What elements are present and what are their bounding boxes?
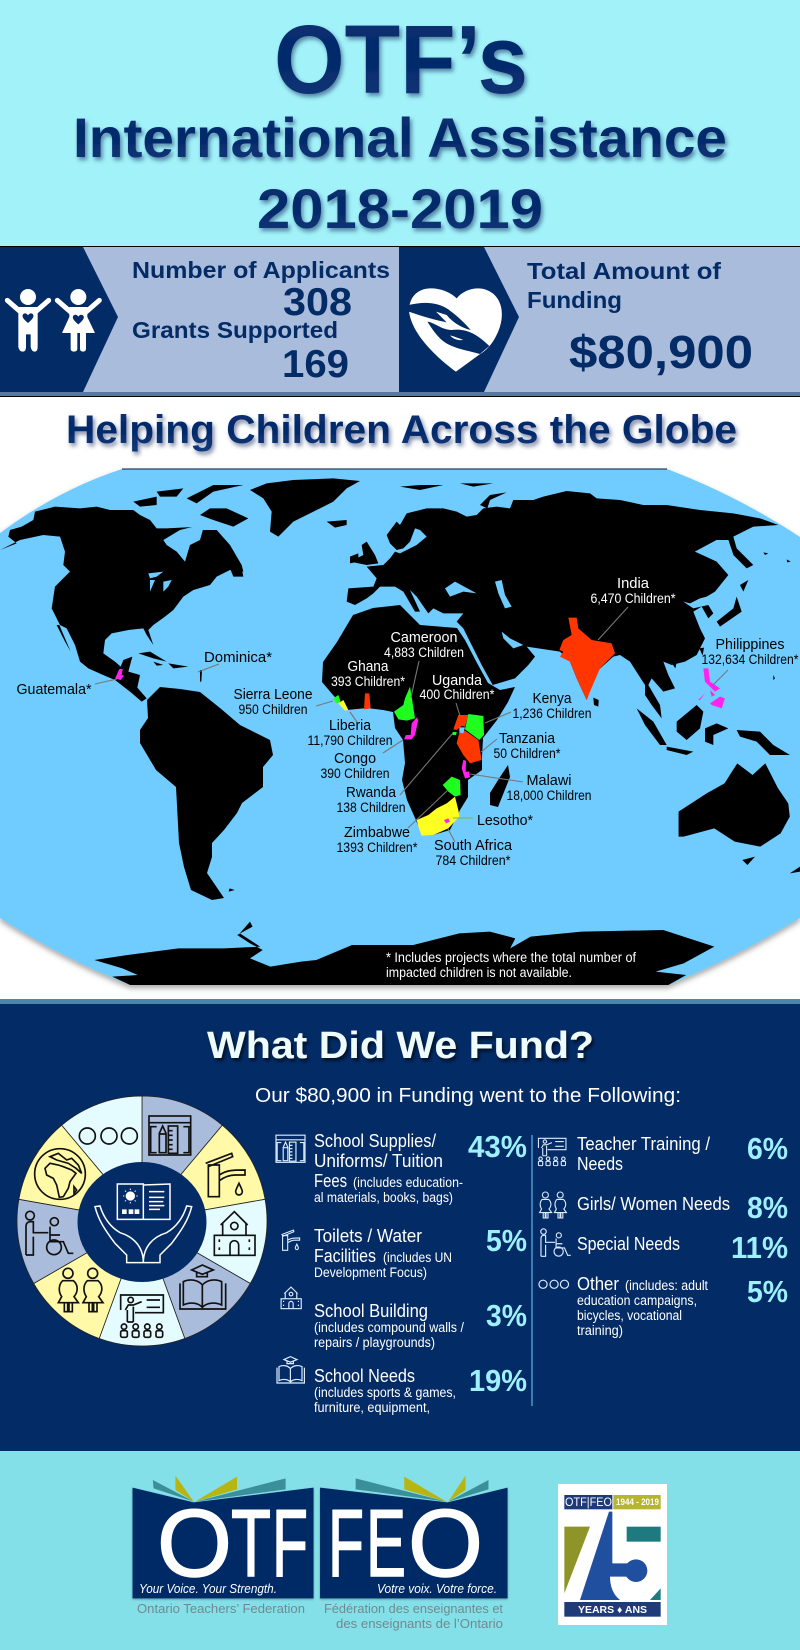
label: Zimbabwe: Zimbabwe (344, 824, 410, 841)
title: International Assistance: International Assistance (73, 106, 727, 169)
logo: 75 years: YEARS ♦ ANS (578, 1605, 647, 1616)
icon: heart with hands (409, 288, 502, 372)
label: Uganda: Uganda (432, 672, 483, 689)
map: Philippines highlight (698, 668, 725, 708)
stat: grants supported: Grants Supported (132, 317, 338, 343)
item: toilets water: Development Focus) (314, 1265, 427, 1280)
icon: children (7, 289, 99, 352)
label: Malawi: Malawi (526, 772, 572, 789)
label: Liberia (308, 717, 392, 748)
label: Rwanda: Rwanda (346, 784, 397, 801)
map: Eurasia (347, 483, 791, 755)
label: Sierra Leone: Sierra Leone (234, 686, 312, 703)
logo: OTF FEO book: des enseignants de l’Ontario (336, 1616, 503, 1631)
label: Tanzania: Tanzania (499, 730, 556, 747)
label: South Africa (434, 837, 513, 868)
item: school needs: School Needs (314, 1366, 415, 1386)
map: Madagascar (490, 765, 510, 807)
logo: OTF FEO book: F (272, 1490, 308, 1597)
logo: OTF FEO book: Votre voix. Votre force. (377, 1581, 497, 1596)
label: India (590, 575, 676, 606)
item: teacher training (538, 1131, 788, 1174)
item: special needs: 11% (731, 1230, 788, 1265)
logo: OTF FEO book: T (231, 1490, 271, 1597)
logo: 75 years: 1944 - 2019 (616, 1497, 659, 1508)
label: Liberia: Liberia (329, 717, 372, 734)
item: teacher training: 6% (747, 1131, 788, 1166)
item: school needs: furniture, equipment, (314, 1400, 430, 1415)
label: Sierra Leone (234, 686, 312, 717)
logo: 75 years (558, 1484, 667, 1625)
title: years: 2018-2019 (257, 177, 543, 240)
item: school building: 3% (486, 1298, 527, 1333)
item: other: education campaigns, (577, 1293, 697, 1308)
map: Africa (322, 605, 515, 835)
label: Rwanda: 138 Children (336, 800, 406, 815)
stat: total funding: $80,900 (569, 326, 753, 378)
label: Philippines (702, 636, 799, 667)
label: Cameroon: 4,883 Children (384, 645, 464, 660)
label: Kenya: Kenya (532, 690, 572, 707)
item: girls women: 8% (747, 1190, 788, 1225)
map: footnote: * Includes projects where the total number of (386, 950, 636, 965)
item: toilets water (281, 1223, 527, 1280)
panel: what did we fund (0, 999, 800, 1451)
label: South Africa: South Africa (434, 837, 513, 854)
title: OTF's: OTF’s (274, 5, 528, 114)
label: Kenya: 1,236 Children (512, 706, 592, 721)
item: other (539, 1274, 788, 1338)
label: Guatemala: Guatemala* (16, 681, 92, 698)
wheel icons (26, 1116, 255, 1337)
panel: map section background (0, 397, 800, 999)
item: toilets water: Toilets / Water (314, 1226, 422, 1246)
stat: number of applicants: Number of Applicants (132, 257, 390, 283)
stat: grants supported (132, 317, 349, 386)
list: right column (538, 1131, 788, 1338)
label: Zimbabwe: 1393 Children* (336, 840, 418, 855)
item: school building (281, 1287, 527, 1350)
stat: total funding: Total Amount of (527, 258, 721, 284)
label: Tanzania (494, 730, 561, 761)
item: toilets water: Facilities (314, 1246, 376, 1266)
map: country labels (16, 575, 799, 868)
map: India highlight (559, 618, 615, 700)
label: India: India (617, 575, 650, 592)
item: school supplies: 43% (468, 1129, 527, 1164)
icon: hands holding book (95, 1184, 192, 1263)
map: footnote (386, 950, 636, 980)
label: Cameroon (384, 629, 464, 660)
item: girls women: Girls/ Women Needs (577, 1194, 730, 1214)
panel: stats band (0, 246, 800, 397)
stat: total funding: Funding (527, 287, 622, 313)
item: school building: repairs / playgrounds) (314, 1335, 435, 1350)
wheel centre (78, 1162, 206, 1282)
item: school needs: (includes sports & games, (314, 1385, 456, 1400)
map: North America and north atlantic (0, 478, 378, 702)
logo: 75 years: OTF|FEO (565, 1497, 612, 1509)
heading: helping children: Helping Children Across the Globe (66, 408, 737, 452)
logo: OTF FEO book: O (157, 1490, 232, 1597)
label: Dominica: Dominica* (204, 649, 272, 666)
label: Lesotho: Lesotho* (477, 812, 533, 829)
item: school needs: 19% (469, 1363, 527, 1398)
stat: number of applicants (132, 257, 390, 324)
label: Malawi: 18,000 Children (506, 788, 592, 803)
item: special needs: Special Needs (577, 1234, 680, 1254)
label: India: 6,470 Children* (590, 591, 676, 606)
label: Congo: 390 Children (320, 766, 390, 781)
label: Kenya (512, 690, 592, 721)
item: toilets water: (includes UN (383, 1250, 452, 1265)
item: school supplies: School Supplies/ (314, 1131, 436, 1151)
label: Sierra Leone: 950 Children (238, 702, 308, 717)
label: Uganda: 400 Children* (420, 687, 495, 702)
item: other: training) (577, 1323, 623, 1338)
label: Congo (320, 750, 390, 781)
item: other: (includes: adult (625, 1278, 708, 1293)
item: toilets water: 5% (486, 1223, 527, 1258)
item: school supplies: Fees (314, 1171, 347, 1191)
logo: OTF FEO book: O (408, 1490, 483, 1597)
label: Tanzania: 50 Children* (494, 746, 561, 761)
map: highlighted countries (333, 687, 484, 836)
list: left column (276, 1129, 527, 1415)
label: Cameroon: Cameroon (390, 629, 458, 646)
heading: what did we fund: What Did We Fund? (207, 1025, 594, 1067)
item: other: bicycles, vocational (577, 1308, 682, 1323)
map: footnote: impacted children is not available. (386, 965, 572, 980)
item: school supplies: al materials, books, bags) (314, 1190, 453, 1205)
label: Ghana: Ghana (348, 658, 389, 675)
item: teacher training: Needs (577, 1154, 623, 1174)
label: Malawi (506, 772, 592, 803)
logo: OTF FEO book (133, 1476, 508, 1631)
item: school supplies (276, 1129, 527, 1205)
label: Zimbabwe (336, 824, 418, 855)
label: Liberia: 11,790 Children (308, 733, 392, 748)
wheel diagram (17, 1096, 267, 1346)
map: leader lines (95, 607, 728, 842)
item: school needs (277, 1357, 527, 1415)
stat: total funding (527, 258, 753, 378)
logo: OTF FEO book: Ontario Teachers’ Federation (137, 1601, 305, 1616)
panel: footer (0, 1451, 800, 1650)
label: South Africa: 784 Children* (436, 853, 511, 868)
item: girls women (540, 1190, 788, 1225)
logo: OTF FEO book: Your Voice. Your Strength. (139, 1581, 277, 1596)
label: Uganda (420, 672, 495, 702)
logo: OTF FEO book: F (328, 1490, 364, 1597)
logo: OTF FEO book: Fédération des enseignantes et (324, 1601, 503, 1616)
item: other: 5% (747, 1274, 788, 1309)
label: Ghana: 393 Children* (331, 674, 406, 689)
item: special needs (541, 1229, 788, 1265)
item: school supplies: (includes education- (353, 1175, 463, 1190)
label: Rwanda (336, 784, 406, 815)
stat: number of applicants: 308 (283, 281, 352, 324)
label: Philippines: Philippines (716, 636, 784, 653)
item: teacher training: Teacher Training / (577, 1134, 710, 1154)
world map (0, 468, 800, 985)
logo: OTF FEO book: E (366, 1490, 406, 1597)
item: other: Other (577, 1274, 619, 1294)
stat: grants supported: 169 (282, 343, 349, 386)
map: Guatemala highlight (115, 669, 124, 680)
item: school supplies: Uniforms/ Tuition (314, 1151, 443, 1171)
item: school building: (includes compound walls / (314, 1320, 464, 1335)
label: Ghana (331, 658, 406, 689)
title band (0, 0, 800, 246)
map: South America (140, 687, 273, 900)
map: Australia and Antarctica (94, 763, 800, 985)
subheading: Our $80,900 in Funding went to the Following: (255, 1085, 681, 1107)
item: school building: School Building (314, 1301, 428, 1321)
label: Congo: Congo (334, 750, 376, 767)
